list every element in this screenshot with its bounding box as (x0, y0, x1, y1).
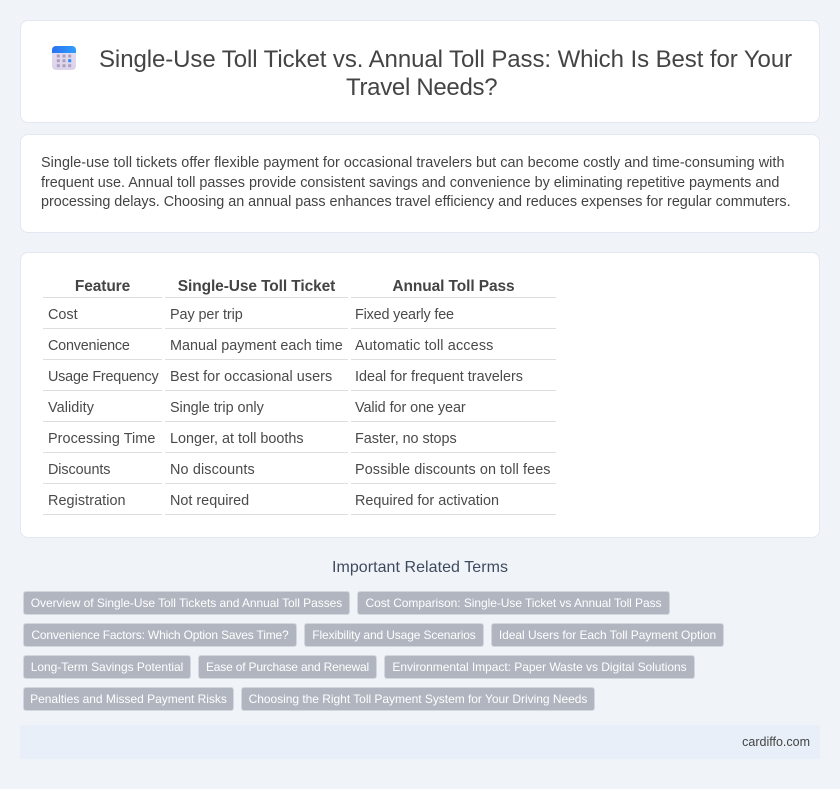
comparison table: Ideal for frequent travelers (355, 369, 523, 385)
intro text (41, 155, 791, 210)
title: Travel Needs? (346, 74, 497, 101)
comparison table: Manual payment each time (170, 338, 343, 354)
comparison table: Cost (48, 307, 78, 323)
comparison table: Single trip only (170, 400, 264, 416)
intro text: frequent use. Annual toll passes provide consistent savings and convenience by eliminating repetitive payments and (41, 175, 779, 191)
related terms chips: Environmental Impact: Paper Waste vs Digital Solutions (392, 660, 687, 674)
related terms chips: Ease of Purchase and Renewal (206, 660, 369, 674)
comparison table: No discounts (170, 462, 255, 478)
related terms chips: Penalties and Missed Payment Risks (30, 692, 227, 706)
comparison table: Longer, at toll booths (170, 431, 304, 447)
table header: Feature (75, 278, 130, 294)
comparison table: Validity (48, 400, 94, 416)
panel: header (20, 20, 820, 123)
comparison table: Required for activation (355, 493, 499, 509)
comparison table: Best for occasional users (170, 369, 332, 385)
comparison table: Usage Frequency (48, 369, 158, 385)
comparison table: Automatic toll access (355, 338, 494, 354)
comparison table: Faster, no stops (355, 431, 457, 447)
comparison table: Not required (170, 493, 249, 509)
title (99, 46, 792, 101)
related terms chips: Convenience Factors: Which Option Saves Time? (31, 628, 289, 642)
intro text: Single-use toll tickets offer flexible payment for occasional travelers but can become costly and time-consuming with (41, 155, 785, 171)
comparison table: Pay per trip (170, 307, 243, 323)
comparison table: Discounts (48, 462, 110, 478)
icon: calendar (52, 46, 76, 70)
intro text: processing delays. Choosing an annual pass enhances travel efficiency and reduces expenses for regular commuters. (41, 194, 791, 210)
related terms chips: Long-Term Savings Potential (31, 660, 183, 674)
footer bar (20, 725, 820, 759)
comparison table: Single-Use Toll Ticket (178, 278, 335, 294)
comparison table: Fixed yearly fee (355, 307, 454, 323)
footer source: cardiffo.com (742, 735, 810, 749)
comparison table: Registration (48, 493, 126, 509)
comparison table (43, 278, 556, 515)
comparison table: Processing Time (48, 431, 155, 447)
related terms chips: Ideal Users for Each Toll Payment Option (499, 628, 716, 642)
related terms heading: Important Related Terms (332, 559, 508, 576)
comparison table: Possible discounts on toll fees (355, 462, 551, 478)
title: Single-Use Toll Ticket vs. Annual Toll Pass: Which Is Best for Your (99, 46, 792, 73)
related terms chips (23, 591, 724, 711)
panel: comparison table (20, 252, 820, 538)
comparison table: Convenience (48, 338, 130, 354)
related terms chips: Cost Comparison: Single-Use Ticket vs Annual Toll Pass (365, 596, 662, 610)
comparison table: Annual Toll Pass (392, 278, 515, 294)
comparison table: Valid for one year (355, 400, 466, 416)
panel: introduction (20, 134, 820, 233)
related terms chips: Overview of Single-Use Toll Tickets and Annual Toll Passes (31, 596, 342, 610)
related terms chips: Choosing the Right Toll Payment System for Your Driving Needs (249, 692, 587, 706)
related terms chips: Flexibility and Usage Scenarios (312, 628, 476, 642)
